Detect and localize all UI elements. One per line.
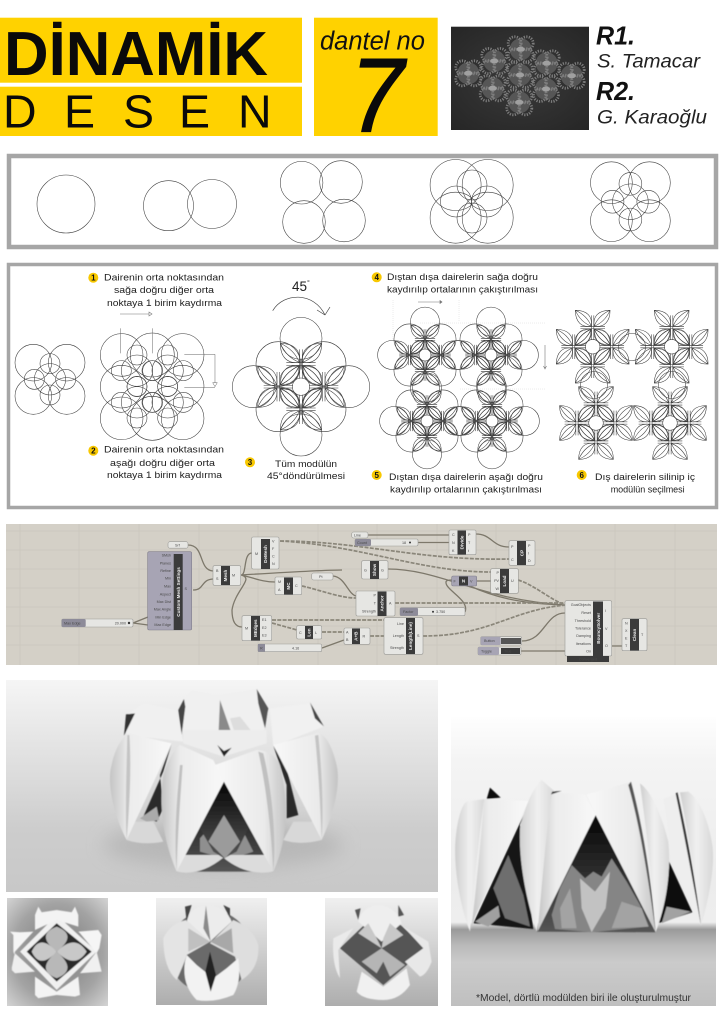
component: Anchor: Anchor (380, 595, 385, 612)
component: Line param: Line (354, 534, 361, 538)
component: CP: P (528, 544, 531, 548)
component: DeMesh: C (272, 554, 275, 558)
component: Clean (622, 619, 647, 651)
step 2 text: Dairenin orta noktasından (104, 445, 224, 456)
credits: S. Tamacar (597, 51, 702, 73)
step 4 text: Dıştan dışa dairelerin sağa doğru (387, 272, 538, 283)
component: N (452, 576, 477, 586)
credits: R1. (596, 22, 635, 50)
component: Toggle (478, 647, 521, 655)
component: A+B: A+B (354, 631, 358, 641)
arrow: right 2 (418, 300, 442, 304)
component: Len: L (315, 631, 317, 635)
component: Divide: N (452, 541, 455, 545)
component: MC (275, 577, 302, 595)
component: Anchor: Strength (362, 610, 376, 614)
slider: R: 4.16 (292, 646, 299, 650)
diagram: one circle (37, 175, 95, 233)
component: Custom Mesh Settings: SMsh (162, 554, 171, 558)
diagram: two circles (144, 180, 236, 231)
step 1 text: noktaya 1 birim kaydırma (107, 298, 223, 309)
slider: R: R (260, 646, 263, 650)
component: BouncySolver: Iterations (576, 642, 591, 646)
render: top view B (156, 898, 267, 1005)
rotation label and arrow: ° (307, 279, 310, 287)
component: Mesh: Mesh (223, 569, 228, 581)
rotation label and arrow: 45 (292, 279, 307, 294)
slider: Factor: 3.750 (436, 610, 445, 614)
step 6 text: Dış dairelerin silinip iç (595, 472, 695, 483)
component: Custom Mesh Settings: Min (165, 577, 171, 581)
component: Divide: T (468, 541, 471, 545)
diagram: base module (15, 344, 85, 414)
component: N: N (462, 579, 466, 584)
component: CP (509, 541, 535, 565)
component: Load (491, 569, 518, 593)
inner shards foreground (200, 782, 248, 858)
step 1 text (88, 273, 224, 309)
component: MEdges: E1 (262, 618, 267, 622)
diagram: inner modules step 6 (556, 310, 708, 459)
render: top view A (7, 898, 108, 1006)
render: front view (451, 717, 716, 1006)
panel: circle construction steps (9, 156, 716, 247)
step 3 text: Tüm modülün (275, 459, 337, 470)
component: Load: W (496, 587, 500, 591)
slider: Max Edge: Max Edge (64, 621, 81, 625)
diagram: four circles (280, 161, 365, 243)
component: Length(Line) (384, 618, 423, 654)
component: Clean: E (625, 636, 628, 640)
component: MC: C (295, 584, 298, 588)
component: BouncySolver (565, 601, 612, 662)
component: N: V (470, 580, 473, 584)
credits: G. Karaoğlu (597, 106, 707, 128)
component: Custom Mesh Settings: S (184, 587, 188, 591)
component: BouncySolver: O (605, 644, 608, 648)
component: Button (481, 637, 522, 645)
component: Length(Line): Length(Line) (408, 622, 413, 650)
rotation label and arrow (273, 279, 330, 315)
component: Length(Line): Strength (390, 646, 404, 650)
component: Clean: T (625, 644, 628, 648)
component: MEdges: E2 (262, 626, 267, 630)
component: Pt: Pt (319, 575, 322, 579)
step 6 text: 6 (579, 471, 584, 480)
diagram: complete module (590, 162, 670, 242)
component: MEdges: E3 (262, 634, 267, 638)
slider: Count: Count (357, 541, 367, 545)
component: Pt (312, 573, 333, 580)
component: MC: MC (286, 582, 291, 590)
component: Anchor: P (374, 594, 377, 598)
petals left (455, 799, 528, 932)
base discs (177, 855, 277, 873)
component: Len (297, 626, 322, 639)
component: A+B: A (346, 630, 349, 634)
component: BouncySolver: Tolerance (575, 626, 591, 630)
component: CP: CP (520, 550, 524, 556)
step 3 text: 45°döndürülmesi (267, 471, 345, 482)
component: CP: I (528, 552, 529, 556)
step 4 text (372, 272, 538, 296)
component: DeMesh (252, 537, 279, 569)
slider: Factor: Factor (403, 610, 414, 614)
component: Load: Load (502, 575, 507, 586)
component: Show: G (381, 568, 384, 572)
component: Len: Len (306, 628, 312, 637)
step 4 text: 4 (374, 273, 379, 282)
component: MEdges: M (245, 626, 248, 630)
front right petal (215, 750, 286, 872)
component: BouncySolver: Converged (579, 658, 597, 662)
component: Line param (352, 532, 368, 538)
component: Clean: X (625, 629, 628, 633)
badge: dantel no 7: 7 (350, 38, 407, 155)
component: Divide: Divide (460, 535, 464, 549)
slider: Max Edge: 20.000 (115, 621, 126, 625)
component: Toggle: Toggle (481, 649, 492, 653)
component: Divide (449, 530, 476, 555)
component: Toggle: True (504, 649, 511, 653)
component: N: F (454, 580, 456, 584)
component: Mesh (213, 566, 241, 585)
render: top view C (325, 898, 438, 1006)
component: Clean: N (625, 622, 628, 626)
component: Button: Button (484, 639, 495, 643)
top strip (183, 730, 267, 757)
step 6 text (577, 470, 695, 495)
component: DeMesh: DeMesh (263, 545, 268, 563)
panel: pattern steps (8, 264, 716, 508)
slider: Factor (400, 608, 465, 616)
front left petal (161, 745, 224, 872)
panel: grasshopper definition (6, 524, 717, 665)
component: Custom Mesh Settings (148, 552, 192, 630)
step 5 text: 5 (374, 471, 379, 480)
component: BouncySolver: BouncySolver (596, 613, 601, 644)
component: DeMesh: F (272, 547, 275, 551)
component: BouncySolver: GoalObjects (571, 603, 591, 607)
diagram: four modules step 4 and 5 (378, 300, 545, 469)
component: Divide: P (468, 533, 471, 537)
step 1 text: sağa doğru diğer orta (114, 285, 215, 296)
component: Length(Line): Line (397, 622, 404, 626)
component: Clean: Clean (632, 629, 637, 641)
component: Len: C (299, 631, 302, 635)
subtitle banner: DESEN: DESEN (3, 85, 272, 137)
component: Custom Mesh Settings: Custom Mesh Settings (176, 567, 181, 617)
component: A+B: R (362, 634, 366, 638)
slider: Max Edge (62, 619, 133, 627)
caption: *Model, dörtlü modülden biri ile oluşturulmuştur (476, 993, 692, 1004)
component: Custom Mesh Settings: Min Edge (155, 615, 171, 619)
diagram: four circles with petals (430, 160, 513, 243)
badge: dantel no 7: dantel no (320, 27, 425, 55)
component: Divide: t (468, 549, 469, 553)
arrow: right (120, 312, 152, 316)
component: Anchor: A (389, 602, 392, 606)
component: A+B (344, 628, 370, 644)
credits (596, 22, 707, 128)
component: Clean: T (641, 633, 644, 637)
component: CP: P (511, 545, 514, 549)
petals right (551, 791, 713, 926)
component: Srf param (168, 542, 188, 548)
badge: dantel no 7 (314, 18, 438, 155)
component: MEdges (242, 616, 272, 641)
arrow: down (544, 345, 546, 369)
inner shards (177, 782, 273, 872)
component: Custom Mesh Settings: Planes (160, 561, 171, 565)
component: Length(Line): Length (393, 634, 404, 638)
component: Mesh: B (216, 569, 219, 573)
component: BouncySolver: Damping (576, 634, 591, 638)
step 6 text: modülün seçilmesi (611, 484, 685, 495)
component: MC: M (278, 580, 281, 584)
interior shards (473, 788, 692, 932)
step 2 text (88, 445, 224, 481)
step 3 text (245, 457, 345, 482)
component: Anchor (356, 591, 395, 616)
outer right petal (273, 733, 338, 840)
component: A+B: B (346, 638, 349, 642)
component: Load: PV (494, 579, 500, 583)
credits: R2. (596, 78, 635, 106)
step 5 text: kaydırılıp ortalarının çakıştırılması (390, 484, 542, 495)
component: MC: A (278, 588, 281, 592)
component: Custom Mesh Settings: Max Angle (154, 608, 171, 612)
component: Divide: K (452, 549, 455, 553)
outer left petal (110, 733, 172, 840)
component: MEdges: MEdges (253, 619, 258, 637)
slider: Count (355, 539, 418, 546)
step 2 text: 2 (91, 447, 96, 456)
component: Load: U (511, 579, 514, 583)
component: DeMesh: M (255, 552, 258, 556)
component: BouncySolver: On (586, 650, 591, 654)
component: CP: C (511, 558, 514, 562)
component: Mesh: S (216, 577, 219, 581)
component: BouncySolver: Reset (581, 611, 591, 615)
component: Custom Mesh Settings: Max Edge (154, 623, 171, 627)
component: Load: P (497, 571, 500, 575)
component: Custom Mesh Settings: Aspect (160, 592, 171, 596)
step 5 text (372, 470, 543, 495)
component: Divide: C (452, 533, 455, 537)
wires (133, 534, 622, 651)
step 3 text: 3 (248, 458, 253, 467)
diagram: rotated module step 3 (232, 317, 370, 456)
shadow (103, 822, 343, 868)
component: BouncySolver: Threshold (575, 619, 591, 623)
step 2 text: noktaya 1 birim kaydırma (107, 470, 223, 481)
component: BouncySolver: I (605, 609, 606, 613)
component: Show: G (364, 568, 367, 572)
photo: lace reference (451, 27, 589, 130)
back petals (124, 689, 324, 747)
step 2 text: aşağı doğru diğer orta (110, 458, 216, 469)
step 5 text: Dıştan dışa dairelerin aşağı doğru (389, 472, 543, 483)
component: DeMesh: N (272, 562, 275, 566)
title banner: DİNAMİK: DİNAMİK (4, 20, 268, 89)
component: DeMesh: V (272, 540, 275, 544)
component: Show: Show (372, 563, 377, 576)
step 4 text: kaydırılıp ortalarının çakıştırılması (387, 285, 538, 296)
step 1 text: Dairenin orta noktasından (104, 273, 224, 284)
render: large perspective view (6, 680, 438, 892)
component: Length(Line): S (417, 634, 420, 638)
slider: R (258, 644, 322, 652)
component: Srf param: Srf (175, 543, 181, 547)
component: Custom Mesh Settings: Max Dist (157, 600, 171, 604)
component: Anchor: T (374, 602, 377, 606)
slider: Count: 18 (402, 541, 406, 545)
diagram: steps 1 and 2 grid (100, 328, 217, 440)
component: Mesh: M (232, 574, 235, 578)
petals middle (520, 780, 669, 932)
component: Custom Mesh Settings: Max (164, 584, 171, 588)
step 1 text: 1 (91, 274, 96, 283)
component: Show (362, 561, 388, 579)
component: BouncySolver: V (605, 627, 608, 631)
component: Custom Mesh Settings: Refine (160, 569, 171, 573)
component: CP: D (528, 559, 531, 563)
